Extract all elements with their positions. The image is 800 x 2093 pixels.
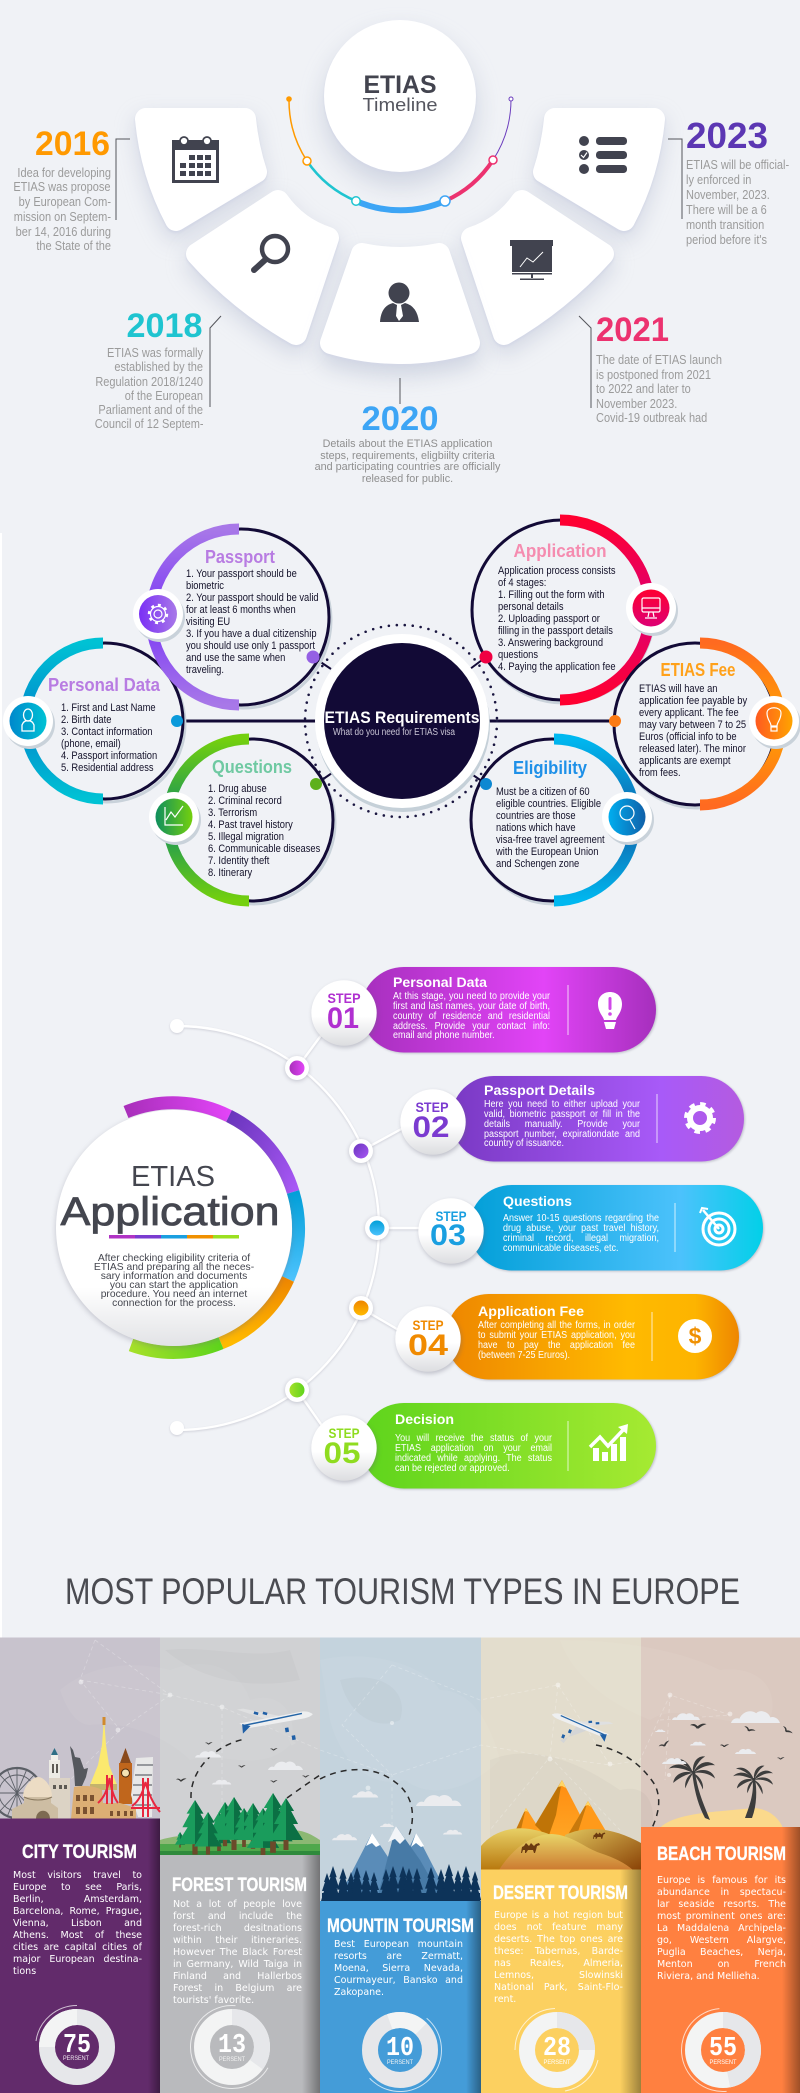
block: 2016 [0, 125, 130, 256]
ring: Questions: 4. Past travel history [208, 819, 292, 831]
big circle: ETIAS Application: connection for the process. [112, 1298, 236, 1309]
centre hub: ETIAS Requirements [305, 625, 497, 817]
panel: Desert Tourism [481, 1870, 641, 2093]
panel: City Tourism: Berlin, Amsterdam, [13, 1894, 142, 1905]
ring: ETIAS Fee: ETIAS will have an [639, 683, 718, 695]
step 02: Passport Details: 02 [412, 1111, 450, 1144]
panel: Beach Tourism: abundance in spectacu- [657, 1887, 786, 1898]
block: 2018: ETIAS was formally [107, 346, 203, 360]
donut: 55 percent: PERSENT [710, 2059, 737, 2066]
block: 2018: Council of 12 Septem- [95, 417, 203, 431]
ring: ETIAS Fee: released later). The minor [639, 743, 746, 755]
block: 2020: released for public. [362, 472, 453, 484]
ring: Application: filling in the passport details [498, 625, 613, 637]
donut: 10 percent: 10 [386, 2034, 414, 2064]
ring: ETIAS Fee: ETIAS Fee [660, 660, 736, 680]
step 02: Passport Details: valid, biometric passport or fill in the [484, 1109, 640, 1120]
panel: City Tourism: Most visitors travel to [13, 1870, 142, 1881]
ring: Passport: 3. If you have a dual citizenship [186, 628, 317, 640]
panel: Beach Tourism [641, 1827, 800, 2093]
ring: Passport: visiting EU [186, 616, 230, 628]
panel: Desert Tourism: nas Reales, Almeria, [494, 1958, 623, 1968]
block: 2023 [668, 115, 800, 250]
step 02: Passport Details: country of issuance. [484, 1138, 564, 1149]
panel: Desert Tourism: these: Tabernas, Barde- [494, 1946, 623, 1956]
block: 2023: period before it's [686, 232, 767, 246]
panel: City Tourism: cities are capital cities of [13, 1942, 142, 1953]
donut: 13 percent: 13 [218, 2031, 246, 2061]
donut: 28 percent: PERSENT [544, 2059, 571, 2066]
panel: Forest Tourism: in Germany, Wild Taiga in [173, 1958, 302, 1970]
step 05: Decision [311, 1403, 656, 1488]
step 03: Questions: Answer 10-15 questions regarding the [503, 1213, 659, 1224]
block: 2023: There will be a 6 [686, 202, 767, 216]
ring: Passport: biometric [186, 580, 224, 592]
centre hub: ETIAS Requirements: What do you need for ETIAS visa [333, 727, 455, 738]
ring: Eligibility: eligible countries. Eligible [496, 798, 601, 810]
big circle: ETIAS Application: Application [60, 1190, 280, 1234]
icon: balloon outline [767, 708, 781, 731]
step 01: Personal Data: country of residence and residential [393, 1011, 550, 1022]
panel: Forest Tourism: forst and include the [173, 1910, 302, 1922]
block: 2021: The date of ETIAS launch [596, 353, 722, 367]
panel: Beach Tourism: go, Western Alargve, [657, 1935, 786, 1946]
step 01: Personal Data: Personal Data [393, 974, 487, 990]
ring: Questions: Questions [212, 757, 292, 777]
timeline petal: 2018 [197, 201, 328, 334]
ring: ETIAS Fee: every applicant. The fee [639, 707, 739, 719]
centre circle: ETIAS [364, 71, 436, 99]
step 04: Application Fee: 04 [408, 1329, 448, 1362]
ring: Personal Data: 4. Passport information [60, 750, 157, 762]
block: 2020: and participating countries are officially [315, 461, 500, 473]
block: 2021: November 2023. [596, 396, 677, 410]
step 05: Decision: You will receive the status of your [395, 1433, 552, 1444]
big circle: ETIAS Application [56, 1103, 299, 1352]
block: 2020: 2020 [362, 400, 438, 438]
donut: 55 percent: 55 [709, 2034, 737, 2064]
centre circle: Timeline [362, 95, 438, 115]
panel: City Tourism [0, 1818, 160, 2093]
ring: Application: 2. Uploading passport or [498, 613, 600, 625]
ring: Passport: you should use only 1 passport [186, 640, 315, 652]
ring: Eligibility: nations which have [496, 822, 576, 834]
panel: Forest Tourism: Not a lot of people love [173, 1898, 302, 1910]
ring: Questions: 6. Communicable diseases [208, 843, 320, 855]
panel: City Tourism: Europe to see Paris, [13, 1882, 142, 1893]
step 04: Application Fee: STEP [412, 1317, 444, 1333]
ring: Eligibility: and Schengen zone [496, 858, 579, 870]
ring: Passport: Passport [205, 547, 275, 567]
panel: Forest Tourism: forest-rich desitnations [173, 1922, 302, 1934]
illustration: mountains [320, 1770, 481, 1902]
step 02: Passport Details: STEP [416, 1099, 448, 1115]
step 02: Passport Details: Passport Details [484, 1082, 595, 1098]
step 03: Questions: communicable diseases, etc. [503, 1243, 619, 1254]
panel: Desert Tourism: rent. [494, 1994, 516, 2004]
step 04: Application Fee: After completing all the forms, in order [478, 1320, 635, 1331]
step 04: Application Fee: to submit your ETIAS application, you [478, 1330, 635, 1341]
ring: Questions: 8. Itinerary [208, 867, 252, 879]
panel: Desert Tourism: deserts. The top ones are [494, 1934, 623, 1944]
panel: City Tourism: Athens. Most of these [13, 1930, 142, 1941]
timeline petal: 2021 [472, 201, 603, 334]
panel: ETIAS requirements [3, 520, 800, 904]
step 01: Personal Data: At this stage, you need to provide your [393, 991, 550, 1002]
panel: Forest Tourism: within their itineraries. [173, 1934, 302, 1946]
block: 2023: 2023 [686, 115, 768, 156]
step 05: Decision: Decision [395, 1411, 454, 1427]
timeline nodes [285, 1056, 389, 1402]
centre circle [324, 20, 476, 172]
block: 2020: steps, requirements, eligbiilty criteria [320, 450, 495, 462]
timeline arc [286, 96, 513, 210]
icon: presentation board [510, 240, 553, 280]
big circle: ETIAS Application: procedure. You need an internet [101, 1289, 247, 1300]
ring: Questions: 2. Criminal record [208, 795, 281, 807]
ring: Questions: 1. Drug abuse [208, 783, 266, 795]
block: 2021: to 2022 and later to [596, 382, 691, 396]
block: 2018: Parliament and of the [98, 403, 203, 417]
step 03: Questions: Questions [503, 1193, 572, 1209]
ring: Application: 4. Paying the application fee [498, 661, 616, 673]
illustration: forest [160, 1697, 320, 1857]
panel: Beach Tourism: most prominent ones are: [657, 1911, 786, 1922]
timeline petal: 2020 [331, 254, 469, 353]
donut: 75 percent [36, 2006, 107, 2077]
step 04: Application Fee: (between 7-25 Eruros). [478, 1350, 570, 1361]
panel: Forest Tourism: tourists' favorite. [173, 1994, 254, 2006]
icon: person outline [22, 709, 34, 731]
ring: Passport [133, 529, 331, 708]
panel: Forest Tourism [160, 1855, 320, 2093]
step 01: Personal Data: address. Provide your contact info: [393, 1021, 550, 1032]
icon: magnifier outline [620, 806, 635, 829]
panel: Mountin Tourism: Best European mountain [334, 1939, 463, 1950]
panel: City Tourism: major European destina- [13, 1954, 142, 1965]
block: 2023: November, 2023. [686, 188, 770, 202]
block: 2021: Covid-19 outbreak had [596, 411, 707, 425]
big circle: ETIAS Application: ETIAS [131, 1161, 215, 1193]
ring: Questions [149, 739, 335, 904]
block: 2016: mission on Septem- [14, 210, 111, 224]
panel: City Tourism: Vienna, Lisbon and [13, 1918, 142, 1929]
donut: 10 percent: PERSENT [387, 2059, 413, 2066]
panel: Mountin Tourism: Zakopane. [334, 1987, 384, 1998]
step 01: Personal Data: STEP [328, 990, 360, 1006]
panel: City Tourism: tions [13, 1966, 36, 1977]
icon: dollar coin: $ [689, 1323, 702, 1349]
step 05: Decision: ETIAS application on your email [395, 1443, 552, 1454]
ring: ETIAS Fee: Euros (official info to be [639, 731, 737, 743]
block: 2016: Idea for developing [17, 166, 111, 180]
icon: gear [686, 1104, 714, 1132]
block: 2023: ly enforced in [686, 172, 751, 186]
ring: Application: 3. Answering background [498, 637, 603, 649]
block: 2023: ETIAS will be official- [686, 158, 789, 172]
ring: Personal Data: 1. First and Last Name [60, 702, 155, 714]
step 05: Decision: STEP [328, 1425, 360, 1441]
step 02: Passport Details [400, 1076, 744, 1162]
illustration: city landmarks [0, 1717, 160, 1819]
block: 2018 [80, 307, 221, 434]
panel: Desert Tourism: National Park, Saint-Flo- [494, 1982, 623, 1992]
illustration: desert [481, 1701, 659, 1870]
ring: Eligibility [471, 739, 654, 904]
big circle: ETIAS Application: you can start the application [110, 1280, 238, 1291]
step 05: Decision: 05 [324, 1437, 360, 1470]
panel: Beach Tourism: La Maddalena Archipela- [657, 1923, 786, 1934]
icon: monitor outline [642, 598, 660, 618]
donut: 28 percent: 28 [543, 2034, 571, 2064]
panel: City Tourism: Barcelona, Rome, Prague, [13, 1906, 142, 1917]
step 03: Questions: criminal record, illegal migration, [503, 1233, 659, 1244]
step 03: Questions: STEP [436, 1208, 466, 1224]
panel: Mountin Tourism [320, 1901, 481, 2093]
step 01: Personal Data: 01 [327, 1002, 359, 1035]
step 03: Questions: 03 [430, 1219, 466, 1252]
step 04: Application Fee: Application Fee [478, 1303, 584, 1319]
icon: growth chart [590, 1424, 628, 1461]
ring: Passport: 1. Your passport should be [186, 568, 297, 580]
panel: Mountin Tourism: resorts are Zermatt, [334, 1951, 463, 1962]
step 03: Questions: drug abuse, your past travel history, [503, 1223, 659, 1234]
panel: ETIAS application [56, 967, 763, 1488]
ring: Passport: traveling. [186, 664, 224, 676]
ring: Questions: 3. Terrorism [208, 807, 257, 819]
world map texture [60, 1640, 773, 1790]
step 02: Passport Details: passport number, expirationdate and [484, 1129, 640, 1140]
ring: Eligibility: Eligibility [513, 758, 587, 778]
panel: Forest Tourism: Finland and Hallerbos [173, 1970, 302, 1982]
centre hub: ETIAS Requirements: ETIAS Requirements [324, 708, 480, 727]
icon: dollar coin [678, 1319, 712, 1353]
ring: Application: of 4 stages: [498, 577, 546, 589]
panel: Desert Tourism: does not feature many [494, 1922, 623, 1932]
icon: calendar [172, 137, 219, 183]
panel: tourism columns background [0, 1638, 800, 1908]
donut: 55 percent [678, 2005, 768, 2093]
step 02: Passport Details: Here you need to either upload your [484, 1099, 640, 1110]
step 05: Decision: can be rejected or approved. [395, 1463, 510, 1474]
ring: Questions: 5. Illegal migration [208, 831, 283, 843]
ring: Passport: for at least 6 months when [186, 604, 296, 616]
block: 2016: by European Com- [19, 195, 111, 209]
step 01: Personal Data: email and phone number. [393, 1030, 495, 1041]
panel: Beach Tourism: Riviera, and Mellieha. [657, 1971, 760, 1982]
block: 2016: 2016 [35, 125, 110, 163]
connector lines [183, 657, 614, 784]
panel: Mountin Tourism: Courmayeur, Bansko and [334, 1975, 463, 1986]
block: 2023: month transition [686, 218, 764, 232]
big circle: ETIAS Application: sary information and documents [101, 1271, 247, 1282]
panel: ETIAS timeline [0, 20, 800, 487]
panel: Forest Tourism: Forest in Belgium are [173, 1982, 302, 1994]
ring: Eligibility: Must be a citizen of 60 [496, 786, 590, 798]
block: 2018: Regulation 2018/1240 [95, 375, 203, 389]
ring: ETIAS Fee: from fees. [639, 767, 681, 779]
panel: City Tourism: CITY TOURISM [22, 1842, 137, 1863]
block: 2021: 2021 [596, 311, 669, 349]
donut: 75 percent: 75 [63, 2031, 91, 2061]
step 04: Application Fee [395, 1294, 739, 1380]
block: 2018: established by the [114, 360, 203, 374]
panel: Forest Tourism: However The Black Forest [173, 1946, 302, 1958]
big circle: ETIAS Application: After checking eligibility criteria of [98, 1253, 250, 1264]
panel: Beach Tourism: Menton on French [657, 1959, 786, 1970]
icon: target [700, 1208, 735, 1245]
step 05: Decision: indicated while applying. The status [395, 1453, 552, 1464]
step 01: Personal Data: first and last names, your date of birth, [393, 1001, 550, 1012]
step 04: Application Fee: have to pay the application fee [478, 1340, 635, 1351]
panel: Desert Tourism: DESERT TOURISM [493, 1883, 628, 1904]
curved connector [170, 1019, 422, 1435]
panel: Beach Tourism: Puglia Beaches, Nerja, [657, 1947, 786, 1958]
timeline petal: 2016 [146, 119, 256, 220]
panel: Desert Tourism: Europe is a hot region but [494, 1910, 623, 1920]
big circle: ETIAS Application: ETIAS and preparing all the neces- [94, 1262, 254, 1273]
icon: check list [579, 136, 627, 174]
block: 2018: 2018 [126, 307, 202, 345]
icon: magnifier [254, 236, 288, 270]
ring: Personal Data: 3. Contact information [60, 726, 152, 738]
ring: Application: Application [514, 541, 606, 561]
donut: 13 percent: PERSENT [219, 2056, 245, 2063]
donut: 13 percent [175, 1990, 289, 2093]
block: 2021 [579, 311, 736, 427]
block: 2018: of the European [125, 389, 203, 403]
block: 2020 [300, 378, 515, 487]
ring: Personal Data: Personal Data [48, 675, 161, 695]
ring: Personal Data: 5. Residential address [60, 762, 153, 774]
ring: Passport: and use the same when [186, 652, 285, 664]
panel: Forest Tourism: FOREST TOURISM [172, 1875, 307, 1896]
ring: Eligibility: with the European Union [496, 846, 598, 858]
ring: Application: Application process consists [498, 565, 616, 577]
ring: Application [472, 520, 678, 703]
ring: ETIAS Fee: applicants are exempt [639, 755, 731, 767]
donut: 28 percent [515, 2008, 598, 2091]
ring: Questions: 7. Identity theft [208, 855, 269, 867]
icon: chart outline [165, 806, 183, 825]
icon: person [380, 282, 419, 322]
ring: Application: personal details [498, 601, 564, 613]
block: 2016: the State of the [36, 239, 111, 253]
donut: 10 percent [342, 1992, 458, 2093]
panel: Mountin Tourism: MOUNTIN TOURISM [327, 1916, 474, 1937]
block: 2021: is postponed from 2021 [596, 368, 711, 382]
ring: ETIAS Fee: application fee payable by [639, 695, 747, 707]
ring: Eligibility: countries are those [496, 810, 576, 822]
panel: Beach Tourism: lar seaside resorts. The [657, 1899, 786, 1910]
block: 2016: ber 14, 2016 during [16, 225, 111, 239]
donut: 75 percent: PERSENT [63, 2055, 89, 2062]
step 02: Passport Details: details manually. Provide your [484, 1119, 640, 1130]
ring: ETIAS Fee: may vary between 7 to 25 [639, 719, 746, 731]
ring: Application: 1. Filling out the form with [498, 589, 605, 601]
ring: Application: questions [498, 649, 538, 661]
ring: Personal Data: 2. Birth date [60, 714, 111, 726]
icon: alert bulb [598, 992, 622, 1029]
ring: Personal Data [3, 643, 185, 802]
panel: Beach Tourism: Europe is famous for its [657, 1875, 786, 1886]
ring: Eligibility: visa-free travel agreement [496, 834, 605, 846]
panel: Desert Tourism: Lemnos, Slowinski [494, 1970, 623, 1980]
illustration: beach [655, 1711, 793, 1828]
panel: Mountin Tourism: Moena, Sierra Nevada, [334, 1963, 463, 1974]
timeline petal: 2023 [544, 119, 654, 220]
ring: ETIAS Fee [609, 643, 800, 808]
icon: gear outline [149, 605, 167, 623]
step 03: Questions [418, 1185, 763, 1270]
ring: Personal Data: (phone, email) [60, 738, 120, 750]
step 01: Personal Data [311, 967, 656, 1052]
ring: Passport: 2. Your passport should be valid [186, 592, 319, 604]
